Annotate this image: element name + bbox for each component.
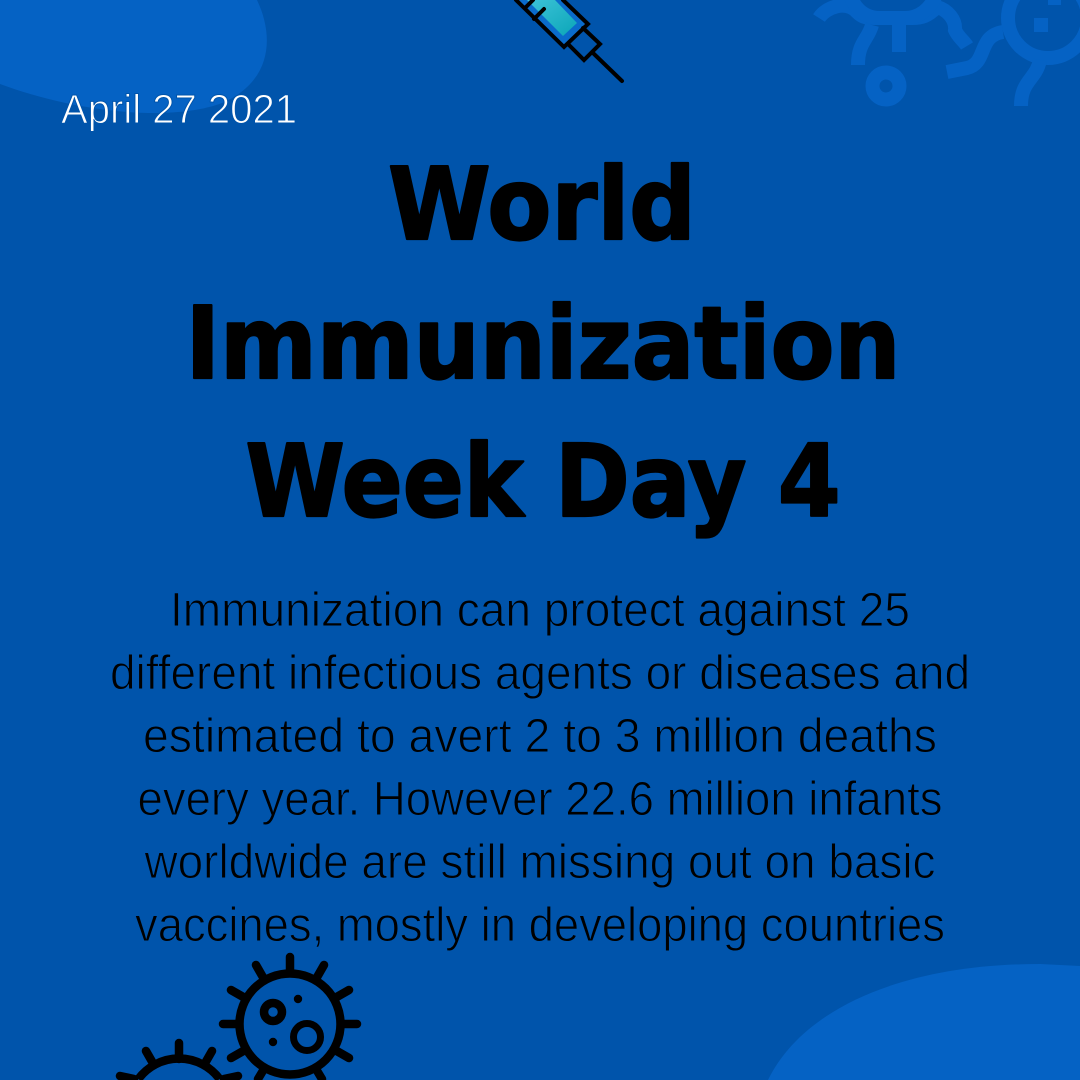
body text: estimated to avert 2 to 3 million deaths [143, 710, 937, 763]
body text: vaccines, mostly in developing countries [135, 899, 945, 952]
title [186, 146, 900, 540]
body text: different infectious agents or diseases and [110, 647, 970, 700]
title: World [388, 146, 696, 263]
date: April 27 2021 [61, 86, 297, 132]
body text: Immunization can protect against 25 [170, 584, 910, 637]
body text: every year. However 22.6 million infants [138, 773, 942, 826]
icon: small virus bottom [120, 1043, 238, 1079]
icon: large virus bottom [223, 957, 357, 1079]
body text [110, 584, 970, 952]
icon: faint virus outline top right [819, 0, 1080, 106]
title: Week Day 4 [246, 423, 840, 540]
body text: worldwide are still missing out on basic [144, 836, 935, 889]
decorative blob: bottom right [768, 964, 1080, 1080]
title: Immunization [186, 285, 900, 402]
icon: syringe [516, 0, 622, 81]
decorative blob: top left [0, 0, 267, 113]
